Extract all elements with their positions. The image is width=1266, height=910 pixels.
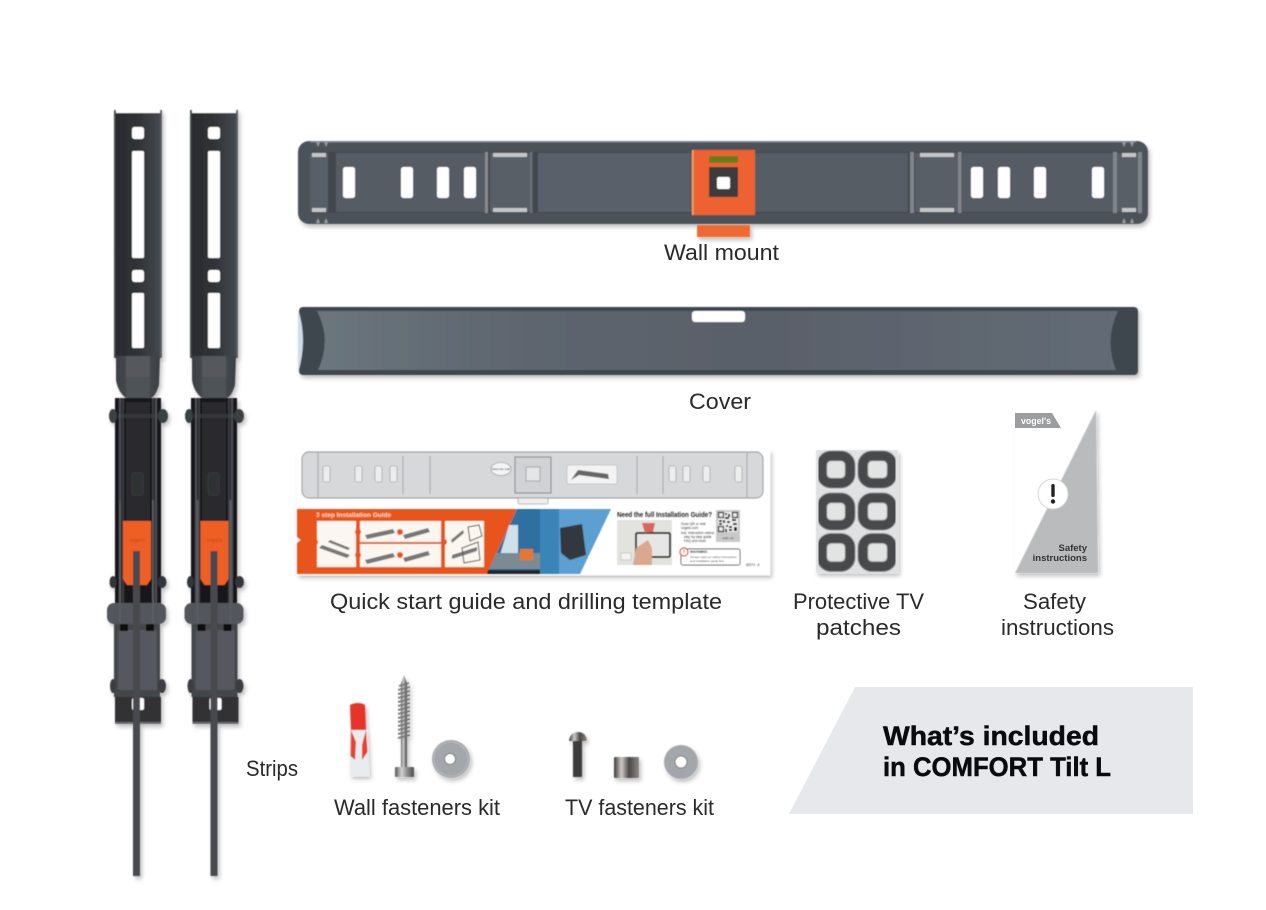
label: cover: Cover bbox=[689, 389, 751, 414]
icon: TV fasteners bbox=[569, 732, 698, 779]
label: protective TV patches: patches bbox=[816, 615, 901, 640]
template outline: Mark the wall bbox=[492, 467, 510, 471]
label: strips: Strips bbox=[246, 756, 298, 781]
title banner bbox=[789, 687, 1193, 814]
band heading: 3 step Installation Guide bbox=[316, 512, 392, 519]
panel: quick start guide and drilling template bbox=[297, 450, 770, 575]
icon: wall fasteners bbox=[350, 675, 470, 778]
booklet logo tag: vogel's bbox=[1021, 416, 1051, 426]
icon: wall plug bbox=[350, 703, 369, 776]
guide scan text: FAQ and more bbox=[684, 539, 706, 543]
bracket strip: left bbox=[107, 110, 168, 876]
booklet text: Safety bbox=[1058, 543, 1088, 554]
guide scan text: step by step guide bbox=[684, 535, 712, 539]
icon: spacer bbox=[614, 757, 639, 778]
label: protective TV patches bbox=[793, 589, 924, 640]
label: quick start guide: Quick start guide and drilling template bbox=[330, 589, 722, 614]
QR code: scan me bbox=[722, 536, 734, 540]
step cards bbox=[312, 521, 484, 567]
warning box: Always read our safety instructions bbox=[690, 555, 737, 559]
bracket strip: right bbox=[184, 110, 244, 876]
guide scan text bbox=[681, 522, 715, 543]
title: in COMFORT Tilt L bbox=[883, 752, 1111, 782]
label: protective TV patches: Protective TV bbox=[793, 589, 924, 614]
orange instruction band bbox=[297, 509, 517, 574]
title: What’s included bbox=[883, 721, 1099, 751]
QR code bbox=[716, 510, 740, 542]
icon: protective TV patches bbox=[816, 450, 898, 573]
label: wall mount: Wall mount bbox=[664, 240, 779, 265]
icon: bolt bbox=[569, 732, 587, 777]
template code: 86974 - A bbox=[746, 563, 761, 567]
tablet photo bbox=[617, 520, 672, 565]
panel: wall mount rail bbox=[298, 141, 1148, 237]
icon: washer bbox=[432, 740, 470, 778]
guide scan text: Incl. instruction videos bbox=[681, 531, 715, 535]
panel: cover bbox=[298, 307, 1138, 375]
booklet text bbox=[1033, 543, 1088, 564]
room photo bbox=[487, 509, 611, 574]
icon: safety instructions booklet bbox=[1015, 410, 1098, 573]
booklet logo tag bbox=[1015, 413, 1061, 428]
label: safety instructions: instructions bbox=[1001, 615, 1114, 640]
warning box bbox=[680, 548, 740, 565]
warning icon bbox=[1038, 479, 1068, 509]
guide heading: Need the full Installation Guide? bbox=[617, 510, 712, 519]
guide scan text: vogels.com bbox=[681, 526, 698, 530]
label: TV fasteners kit: TV fasteners kit bbox=[565, 795, 714, 820]
label: safety instructions: Safety bbox=[1023, 589, 1086, 614]
icon: TV washer bbox=[664, 745, 698, 779]
warning box: and installation guide first bbox=[690, 559, 724, 563]
booklet text: instructions bbox=[1033, 553, 1087, 564]
guide scan text: Scan QR or visit bbox=[681, 522, 706, 526]
warning box: WARNING bbox=[690, 550, 708, 554]
label: wall fasteners kit: Wall fasteners kit bbox=[334, 795, 500, 820]
template outline bbox=[302, 452, 763, 504]
icon: screw bbox=[395, 675, 414, 777]
label: safety instructions bbox=[1001, 589, 1114, 640]
